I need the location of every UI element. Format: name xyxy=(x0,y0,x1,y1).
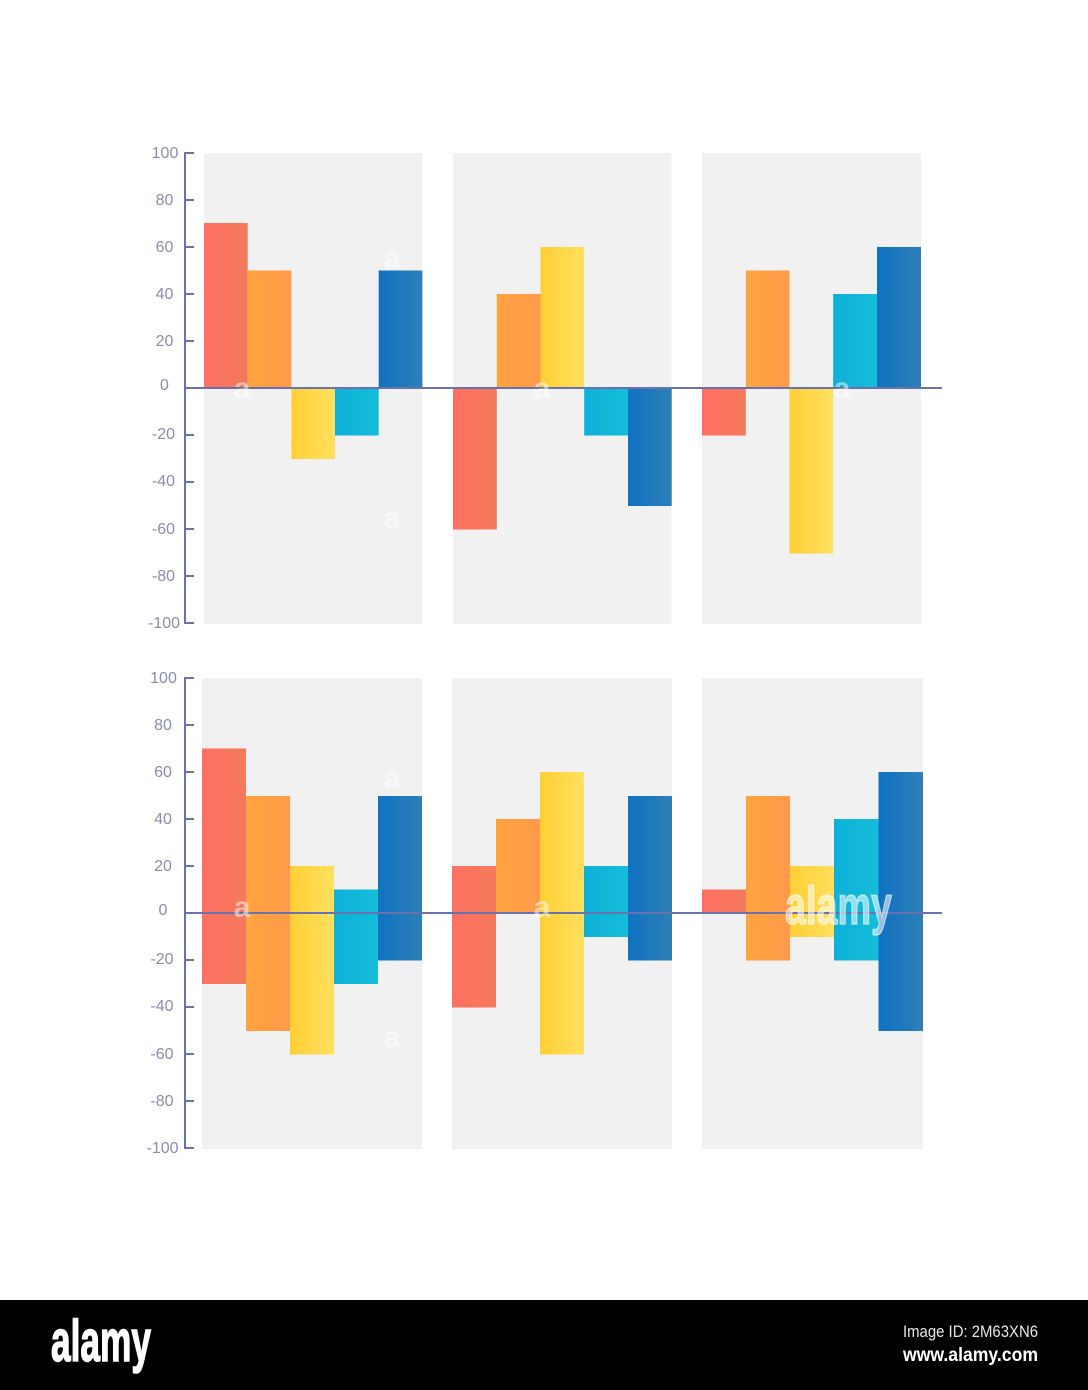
y axis labels: -60 xyxy=(152,521,175,538)
y axis labels: 0 xyxy=(159,902,168,919)
watermark letters: a xyxy=(534,372,551,405)
watermark letters: a xyxy=(384,1021,401,1054)
y axis labels: 40 xyxy=(154,811,172,828)
panel: top chart group 2 xyxy=(453,153,672,624)
watermark letters: a xyxy=(384,762,401,795)
y axis labels: 40 xyxy=(156,286,174,303)
y axis labels: 0 xyxy=(160,377,169,394)
panel: top chart group 1 xyxy=(204,153,422,624)
watermark letters: a xyxy=(384,242,401,275)
y axis labels: 60 xyxy=(156,239,174,256)
y axis labels: 100 xyxy=(152,145,178,162)
y axis labels xyxy=(146,670,179,1157)
y axis labels: -100 xyxy=(148,615,180,632)
y axis labels: 60 xyxy=(154,764,172,781)
panel: top chart group 3 xyxy=(702,153,921,624)
image id: Image ID: 2M63XN6 xyxy=(903,1322,1038,1341)
y axis with ticks xyxy=(185,678,194,1148)
panel: bottom chart group 1 xyxy=(202,678,422,1149)
watermark letters: a xyxy=(234,372,251,405)
y axis labels: -80 xyxy=(152,568,175,585)
zero line xyxy=(185,912,942,914)
y axis labels: 80 xyxy=(156,192,174,209)
y axis labels xyxy=(148,145,180,632)
y axis labels: -60 xyxy=(150,1046,174,1063)
y axis labels: -100 xyxy=(146,1140,179,1157)
top bar chart xyxy=(148,145,942,632)
bottom bar chart xyxy=(146,670,942,1157)
watermark letters: a xyxy=(834,372,851,405)
footer bar xyxy=(0,1300,1088,1390)
watermark letters: a xyxy=(384,502,401,535)
y axis labels: -20 xyxy=(150,951,174,968)
watermark letters: a xyxy=(234,891,251,924)
watermark logo: alamy xyxy=(785,876,892,936)
y axis labels: -40 xyxy=(152,473,175,490)
zero line xyxy=(185,387,942,389)
y axis labels: -20 xyxy=(152,426,175,443)
y axis labels: 100 xyxy=(150,670,177,687)
footer logo: alamy xyxy=(51,1309,151,1374)
y axis labels: 80 xyxy=(154,717,172,734)
y axis labels: 20 xyxy=(154,858,172,875)
y axis labels: -80 xyxy=(150,1093,174,1110)
y axis labels: 20 xyxy=(156,333,174,350)
y axis with ticks xyxy=(185,153,194,623)
panel: bottom chart group 3 xyxy=(702,678,923,1149)
y axis labels: -40 xyxy=(150,998,174,1015)
panel: bottom chart group 2 xyxy=(452,678,672,1149)
watermark letters: a xyxy=(534,891,551,924)
watermark letters xyxy=(234,242,851,1054)
website: www.alamy.com xyxy=(902,1345,1038,1366)
